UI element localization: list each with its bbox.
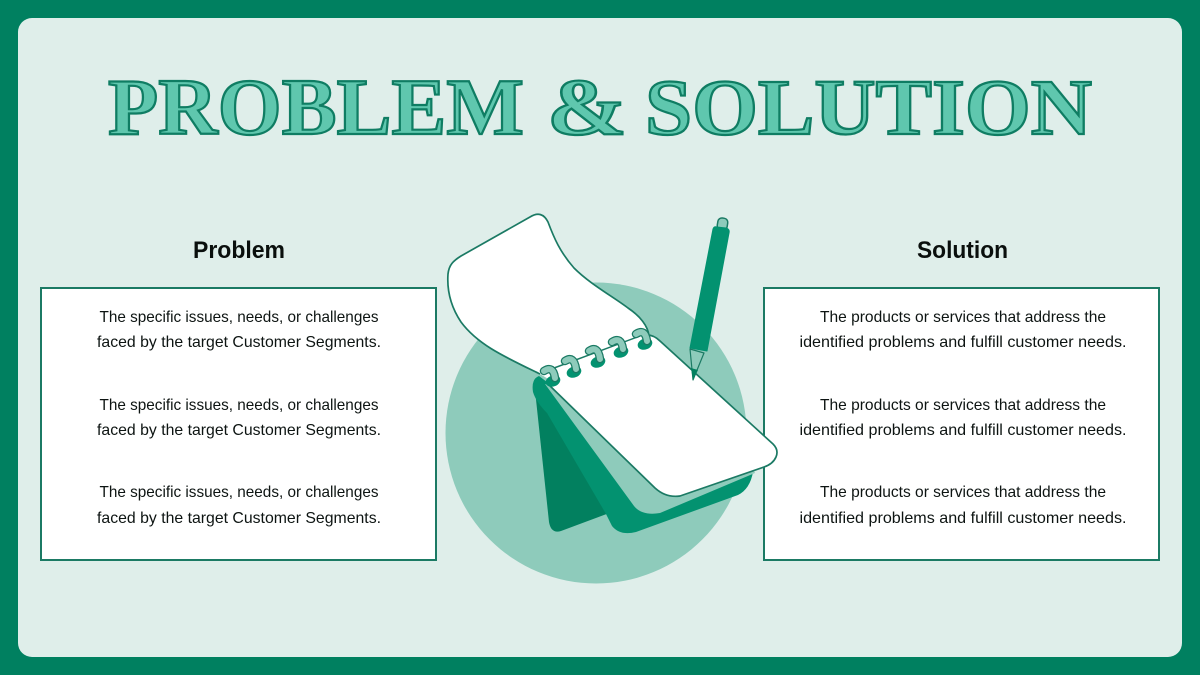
pen clicker bbox=[717, 217, 728, 231]
pen nib bbox=[691, 368, 698, 380]
title: & bbox=[547, 63, 627, 152]
solution text box: identified problems and fulfill customer needs. bbox=[800, 510, 1126, 527]
title: PROBLEM bbox=[108, 63, 524, 152]
solution text box: The products or services that address the bbox=[820, 484, 1106, 501]
problem text box: faced by the target Customer Segments. bbox=[97, 422, 381, 439]
open white page bbox=[547, 335, 777, 496]
title: SOLUTION bbox=[645, 63, 1092, 151]
ring holes bbox=[544, 336, 654, 389]
problem text box: The specific issues, needs, or challenges bbox=[100, 309, 378, 326]
spiral binding bbox=[544, 332, 654, 389]
background circle bbox=[446, 282, 746, 584]
pen bbox=[690, 217, 729, 380]
solution text box: identified problems and fulfill customer needs. bbox=[800, 334, 1126, 351]
heading: problem: Problem bbox=[193, 237, 285, 264]
problem text box: faced by the target Customer Segments. bbox=[97, 510, 381, 527]
solution text box: The products or services that address the bbox=[820, 309, 1106, 326]
curled white page bbox=[448, 214, 649, 380]
problem text box: faced by the target Customer Segments. bbox=[97, 334, 381, 351]
illustration: notebook and pen bbox=[446, 214, 777, 583]
problem text box bbox=[41, 288, 436, 560]
heading: solution: Solution bbox=[917, 237, 1008, 264]
panel: problem bbox=[41, 237, 436, 560]
solution text box: identified problems and fulfill customer needs. bbox=[800, 422, 1126, 439]
light page bbox=[545, 384, 755, 514]
darkest back cover bbox=[535, 390, 612, 532]
problem text box: The specific issues, needs, or challenges bbox=[100, 484, 378, 501]
solution text box bbox=[764, 288, 1159, 560]
rings bbox=[544, 332, 647, 378]
solution text box: The products or services that address the bbox=[820, 397, 1106, 414]
pen body bbox=[690, 227, 729, 351]
spiral wire bbox=[546, 336, 640, 371]
pen tip bbox=[690, 349, 704, 380]
panel: solution bbox=[764, 237, 1159, 560]
title bbox=[108, 63, 1092, 152]
middle back cover bbox=[533, 376, 753, 533]
problem text box: The specific issues, needs, or challenges bbox=[100, 397, 378, 414]
